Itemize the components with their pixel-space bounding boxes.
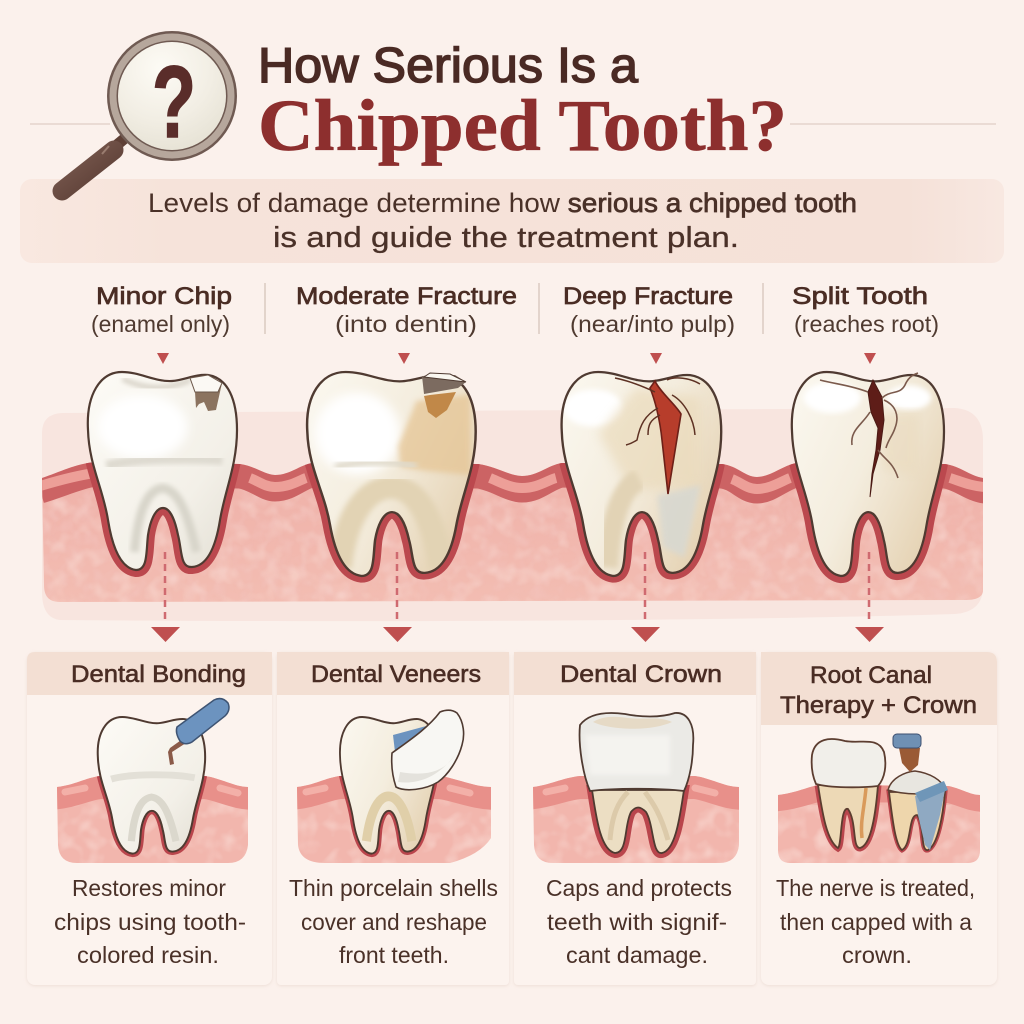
heading: Root Canal bbox=[810, 662, 932, 689]
gum body bbox=[42, 462, 983, 602]
pointer triangles above teeth bbox=[157, 353, 876, 364]
icon: magnifying glass with question mark bbox=[62, 31, 237, 191]
gum texture bbox=[40, 490, 985, 605]
subtitle banner bbox=[20, 179, 1004, 263]
dentin damage bbox=[424, 392, 456, 418]
scene: root canal and crowned tooth bbox=[770, 734, 985, 865]
panel: dental veneers bbox=[277, 652, 509, 985]
label: moderate fracture: Moderate Fracture bbox=[296, 283, 517, 310]
label: minor chip: (enamel only) bbox=[91, 311, 230, 337]
arrow: bonding bbox=[151, 552, 180, 642]
deep crack bbox=[650, 381, 681, 494]
tooth 2: moderate fracture bbox=[307, 372, 476, 576]
label: minor chip: Minor Chip bbox=[96, 283, 232, 310]
description: chips using tooth- bbox=[54, 909, 246, 935]
label: minor chip bbox=[91, 283, 232, 337]
description: cant damage. bbox=[566, 942, 708, 968]
chip damage bbox=[195, 383, 222, 411]
scene: gum and tooth with bonding tool bbox=[50, 699, 255, 865]
panel: dental bonding bbox=[27, 652, 272, 985]
description: Caps and protects bbox=[546, 875, 732, 901]
damage level labels bbox=[91, 283, 939, 337]
tooth 3: deep fracture bbox=[562, 372, 721, 576]
label: moderate fracture: (into dentin) bbox=[335, 311, 477, 337]
scene: tooth with crown bbox=[525, 713, 745, 865]
title bbox=[258, 39, 787, 166]
tooth 4: split tooth bbox=[792, 372, 944, 576]
description: crown. bbox=[842, 942, 912, 968]
panel: dental crown bbox=[514, 652, 756, 985]
description: Thin porcelain shells bbox=[289, 875, 498, 901]
label: split tooth: Split Tooth bbox=[792, 283, 928, 310]
title: How Serious Is a bbox=[258, 39, 639, 93]
label: deep fracture bbox=[563, 283, 735, 337]
heading bbox=[780, 662, 977, 719]
gum illustration band bbox=[42, 408, 983, 621]
pale backdrop bbox=[42, 408, 983, 621]
description bbox=[54, 875, 246, 968]
description: The nerve is treated, bbox=[776, 875, 975, 901]
split crack bbox=[868, 380, 884, 497]
subtitle banner: is and guide the treatment plan. bbox=[273, 222, 739, 254]
description bbox=[289, 875, 498, 968]
heading: Therapy + Crown bbox=[780, 692, 977, 719]
description: then capped with a bbox=[780, 909, 972, 935]
heading: Dental Veneers bbox=[311, 661, 481, 688]
label: deep fracture: (near/into pulp) bbox=[570, 311, 735, 337]
label: moderate fracture bbox=[296, 283, 517, 337]
connector arrows bbox=[151, 552, 884, 642]
label: split tooth: (reaches root) bbox=[794, 311, 939, 337]
description: colored resin. bbox=[77, 942, 219, 968]
panel: root canal therapy + crown bbox=[761, 652, 997, 985]
description: teeth with signif- bbox=[547, 909, 727, 935]
scene: tooth with veneer shell bbox=[290, 710, 497, 865]
gum margin band bbox=[40, 372, 985, 576]
title: Chipped Tooth? bbox=[258, 85, 787, 166]
description: front teeth. bbox=[339, 942, 449, 968]
description bbox=[776, 875, 975, 968]
icon: magnifying glass with question mark: ? bbox=[152, 44, 196, 159]
heading: Dental Bonding bbox=[71, 661, 246, 688]
description: Restores minor bbox=[72, 875, 226, 901]
description: cover and reshape bbox=[301, 909, 487, 935]
label: deep fracture: Deep Fracture bbox=[563, 283, 733, 310]
subtitle banner: Levels of damage determine how serious a chipped tooth bbox=[148, 188, 857, 218]
arrow: veneers bbox=[383, 552, 412, 642]
arrow: root canal bbox=[855, 552, 884, 642]
tooth 1: minor chip bbox=[88, 372, 237, 570]
title divider lines bbox=[30, 123, 996, 125]
heading: Dental Crown bbox=[560, 661, 722, 688]
label: split tooth bbox=[792, 283, 939, 337]
description bbox=[546, 875, 732, 968]
arrow: crown bbox=[631, 552, 660, 642]
